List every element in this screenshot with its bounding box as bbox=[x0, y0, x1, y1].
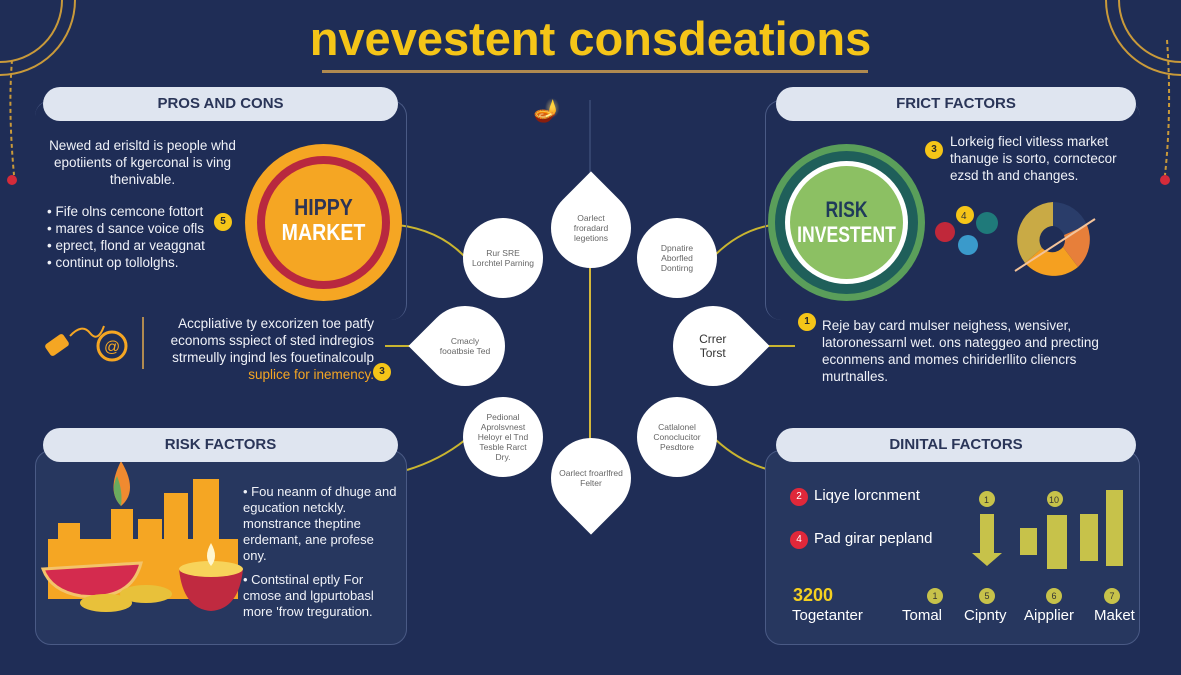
node right drop bbox=[656, 289, 770, 403]
icon: balls and donut chart: 4 bbox=[961, 211, 967, 222]
icon: hippy market circle bbox=[245, 144, 402, 301]
node: Pedional Aprolsvnest Heloyr el Tnd Tesble Rarct Dry. bbox=[478, 412, 528, 462]
bar chart: 1 bbox=[984, 495, 989, 505]
panel: dinital factors: Maket bbox=[1094, 607, 1135, 624]
node bbox=[637, 218, 717, 298]
icon: risk investent circle: RISK bbox=[825, 197, 868, 222]
panel: pros and cons bbox=[35, 87, 618, 609]
panel: dinital factors bbox=[765, 450, 1140, 645]
icon: diya: 🪔 bbox=[533, 98, 560, 123]
heading: risk factors: RISK FACTORS bbox=[165, 436, 276, 453]
node bbox=[463, 397, 543, 477]
text: 5 bbox=[220, 216, 226, 227]
node right drop: Torst bbox=[700, 346, 726, 360]
node top drop: Oarlect froradard legetions bbox=[574, 213, 608, 243]
panel: dinital factors: 5 bbox=[984, 591, 990, 601]
text: 1 bbox=[804, 316, 810, 327]
panel: dinital factors: 6 bbox=[1051, 591, 1056, 601]
node: Rur SRE Lorchtel Parning bbox=[472, 248, 534, 268]
node bbox=[637, 397, 717, 477]
icon: payment: @ bbox=[104, 339, 120, 356]
text block: Reje bay card mulser neighess, wensiver, latoronessarnl wet. ons nateggeo and precting econmens and momes chiriderllito cliencrs murtnalles. bbox=[822, 318, 1099, 384]
node right drop: Crrer bbox=[699, 332, 727, 346]
panel: dinital factors: 1 bbox=[932, 591, 938, 601]
icon: balls and donut chart bbox=[935, 202, 1096, 276]
heading: dinital factors: DINITAL FACTORS bbox=[889, 436, 1023, 453]
heading: risk factors bbox=[43, 428, 398, 462]
text block: risk bullets: • Fou neanm of dhuge and egucation netckly. monstrance theptine erdemant, ane profese ony. bbox=[243, 484, 396, 563]
icon: payment bbox=[45, 326, 128, 362]
node: Catlalonel Conoclucitor Pesdtore bbox=[653, 422, 701, 452]
panel: dinital factors: Liqye lorcnment bbox=[814, 487, 920, 504]
node bottom drop: Oarlect froarlfred Felter bbox=[559, 468, 623, 488]
text block: bullets: • continut op tollolghs. bbox=[47, 255, 179, 270]
text: 3 bbox=[931, 144, 937, 155]
node top drop bbox=[534, 171, 648, 285]
illustration: bars and diya bbox=[40, 462, 243, 612]
panel: dinital factors: 7 bbox=[1109, 591, 1114, 601]
panel: dinital factors: Aipplier bbox=[1024, 607, 1074, 624]
bar chart bbox=[972, 490, 1123, 569]
panel: dinital factors: 2 bbox=[796, 491, 802, 502]
text block: bullets bbox=[47, 204, 205, 270]
panel: dinital factors: Pad girar pepland bbox=[814, 530, 932, 547]
center nodes bbox=[408, 172, 770, 534]
icon: risk investent circle bbox=[768, 144, 925, 301]
heading: pros and cons: PROS AND CONS bbox=[157, 95, 284, 112]
heading bbox=[776, 87, 1136, 121]
panel: dinital factors: Tomal bbox=[902, 607, 942, 624]
text block: risk bullets bbox=[243, 484, 396, 619]
title: nvevestent consdeations bbox=[310, 12, 871, 65]
text block: bullets: • Fife olns cemcone fottort bbox=[47, 204, 203, 219]
node bottom drop bbox=[534, 421, 648, 535]
icon: hippy market circle: HIPPY bbox=[294, 194, 353, 220]
panel: dinital factors: Cipnty bbox=[964, 607, 1007, 624]
text block: intro: Newed ad erisltd is people whd epotiients of kgerconal is ving thenivable. bbox=[49, 138, 236, 187]
panel: risk factors bbox=[35, 450, 407, 645]
node left drop: Cmacly fooatbsie Ted bbox=[440, 336, 490, 356]
text block: bullets: • mares d sance voice ofls bbox=[47, 221, 204, 236]
node bbox=[463, 218, 543, 298]
panel: dinital factors: 3200 bbox=[793, 585, 833, 605]
node: Dpnatire Aborfled Dontirng bbox=[661, 243, 693, 273]
heading: FRICT FACTORS bbox=[896, 95, 1016, 112]
node left drop bbox=[408, 289, 522, 403]
bar chart: 10 bbox=[1049, 495, 1059, 505]
text block: bullets: • eprect, flond ar veaggnat bbox=[47, 238, 205, 253]
panel: dinital factors: 4 bbox=[796, 534, 802, 545]
panel: dinital factors: Togetanter bbox=[792, 607, 863, 624]
heading: pros and cons bbox=[43, 87, 398, 121]
icon: risk investent circle: INVESTENT bbox=[797, 222, 896, 247]
icon: hippy market circle: MARKET bbox=[282, 219, 365, 245]
text block: risk bullets: • Contstinal eptly For cmose and lgpurtobasl more 'frow treguration. bbox=[243, 572, 374, 619]
text block: middle left: Accpliative ty excorizen toe patfy economs sspiect of sted indregios strmeully ingind les fouetinalcoulp suplice for inemency. bbox=[171, 316, 374, 382]
panel: frict factors bbox=[765, 87, 1140, 384]
heading: dinital factors bbox=[776, 428, 1136, 462]
text: 3 bbox=[379, 366, 385, 377]
text block: Lorkeig fiecl vitless market thanuge is sorto, cornctecor ezsd th and changes. bbox=[950, 134, 1117, 183]
